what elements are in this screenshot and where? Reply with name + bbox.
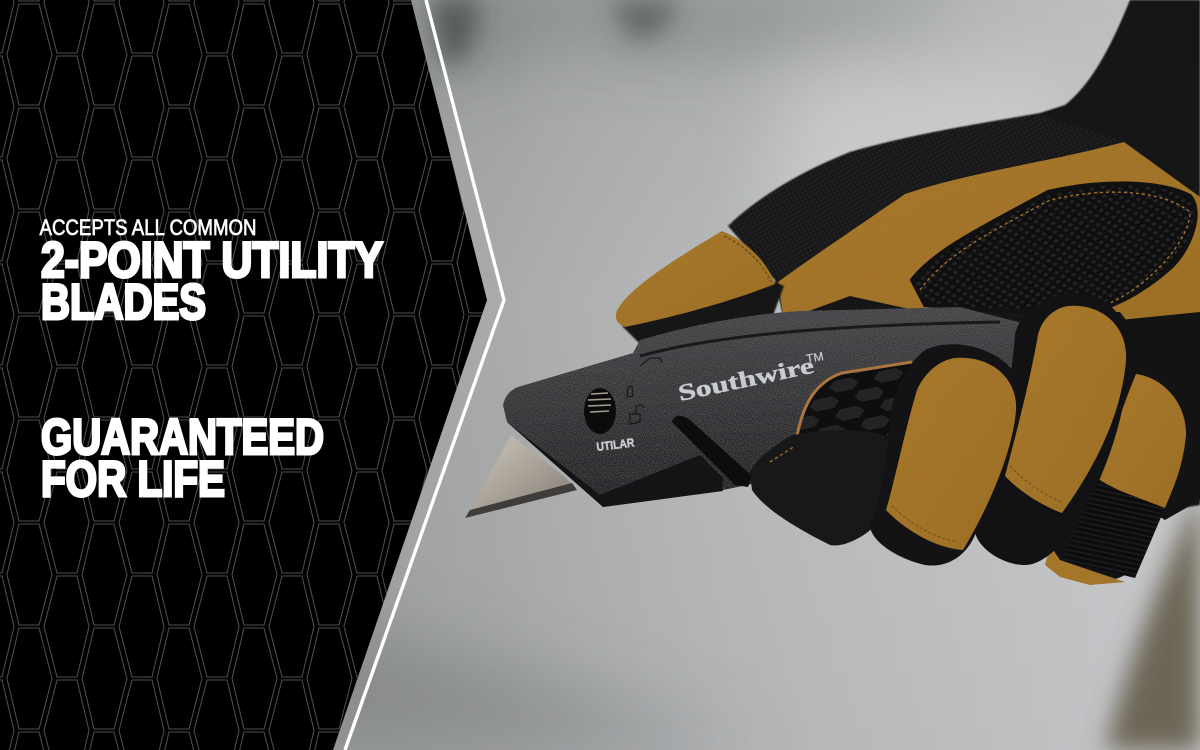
glove: lower hand shadow xyxy=(1100,312,1200,520)
label: UTILAR: UTILAR xyxy=(596,435,635,454)
blurred figure at lower right xyxy=(1105,490,1200,750)
heading line: for life: FOR LIFE xyxy=(41,451,225,507)
logo: Southwire: Southwire xyxy=(676,353,816,406)
knife top groove xyxy=(640,322,1000,356)
glove: rubber palm pad xyxy=(912,183,1196,311)
panel: black hexagon-pattern arrow xyxy=(0,0,487,750)
glove: tan palm band xyxy=(778,142,1200,333)
knife xyxy=(465,307,1030,518)
glove: black thumb xyxy=(750,430,896,545)
knife blade xyxy=(465,435,577,518)
icon: lock symbols xyxy=(627,358,662,424)
knife grip panel xyxy=(797,362,912,440)
heading line: 2-point utility: 2-POINT UTILITY xyxy=(41,232,383,288)
knife nose underside xyxy=(507,422,723,507)
heading line: guaranteed: GUARANTEED xyxy=(41,409,324,465)
blurred photo background xyxy=(333,0,1200,750)
logo: trademark: TM xyxy=(805,349,825,366)
glove: first finger xyxy=(870,344,1021,566)
knife body xyxy=(503,307,1030,507)
glove: tan forefinger tip xyxy=(616,231,775,327)
glove: back of hand and cuff xyxy=(728,0,1200,510)
arrow: white chevron line xyxy=(345,0,504,750)
glove: second finger xyxy=(975,293,1129,565)
photo: gloved hand holding utility knife xyxy=(465,0,1200,585)
knife blade slot xyxy=(672,416,752,487)
text block: guaranteed for life xyxy=(41,409,324,507)
text block: accepts all common 2-point utility blades xyxy=(40,215,383,330)
knife lock slider xyxy=(584,388,616,434)
subheading: ACCEPTS ALL COMMON xyxy=(40,215,256,240)
glove: third finger xyxy=(1045,371,1187,585)
heading line: blades: BLADES xyxy=(41,274,206,330)
glove: black fingertip underside xyxy=(622,280,784,344)
